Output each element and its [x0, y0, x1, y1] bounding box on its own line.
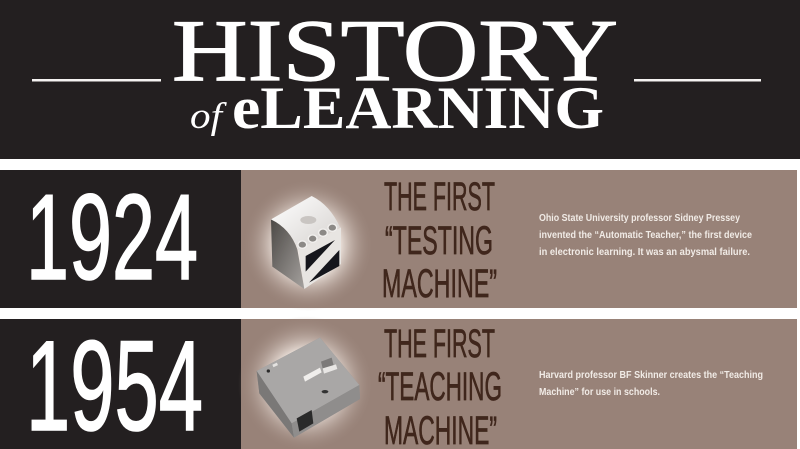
- panel: 1954: [0, 315, 797, 449]
- title: of: [190, 96, 227, 137]
- heading: the first teaching machine: THE FIRST: [384, 322, 495, 366]
- heading: the first testing machine: THE FIRST: [384, 175, 495, 219]
- heading: the first testing machine: “TESTING: [385, 219, 493, 263]
- title: eLEARNING: [232, 75, 604, 141]
- text: 1924 description: Ohio State University professor Sidney Pressey: [539, 212, 740, 224]
- text: 1924 description: invented the “Automatic Teacher,” the first device: [539, 229, 752, 241]
- text: 1954 description: [539, 369, 763, 398]
- heading: the first teaching machine: “TEACHING: [378, 365, 502, 409]
- icon: teaching machine: [238, 316, 374, 449]
- text: 1924 description: in electronic learning. It was an abysmal failure.: [539, 246, 750, 258]
- title: HISTORY: [172, 3, 618, 100]
- title: [172, 3, 618, 141]
- heading: the first testing machine: [382, 175, 497, 306]
- heading: the first testing machine: MACHINE”: [382, 262, 497, 306]
- text: 1924 description: [539, 212, 752, 258]
- header band: [0, 0, 800, 159]
- panel: 1924: [0, 169, 797, 308]
- heading: the first teaching machine: [378, 322, 502, 449]
- year 1924: 1924: [26, 169, 198, 305]
- text: 1954 description: Machine” for use in schools.: [539, 386, 660, 398]
- icon: testing machine: [242, 179, 374, 311]
- text: 1954 description: Harvard professor BF Skinner creates the “Teaching: [539, 369, 763, 381]
